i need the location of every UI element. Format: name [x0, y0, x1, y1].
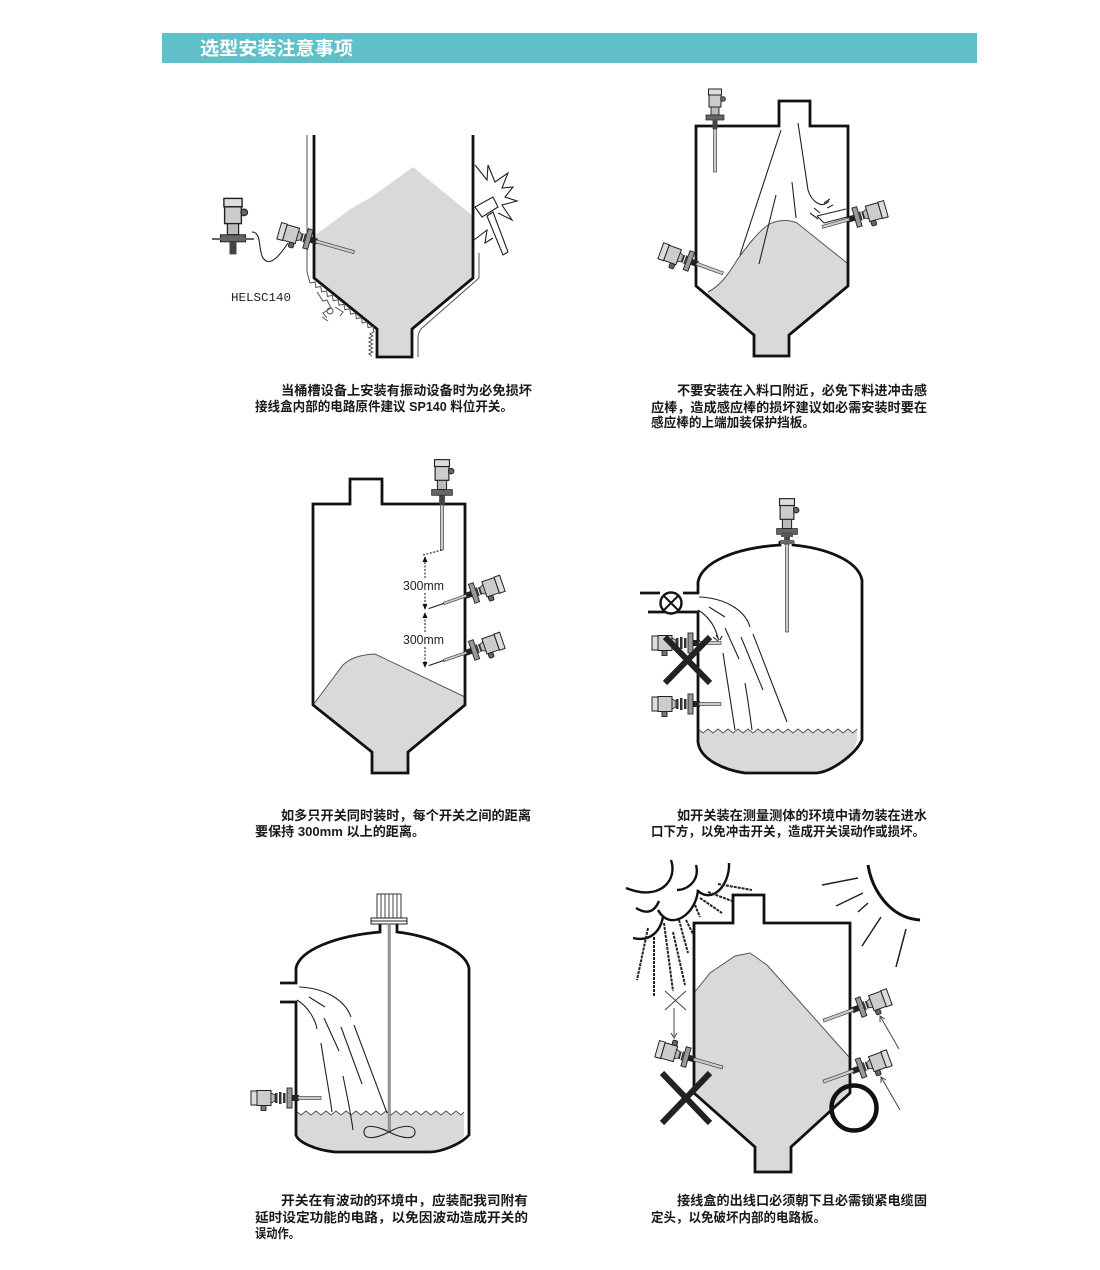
tank outline [640, 541, 862, 773]
header title: 选型安装注意事项 [200, 38, 354, 59]
outer frame lines [307, 135, 479, 357]
angled sensor [276, 221, 357, 265]
caption: 感应棒的上端加装保护挡板。 [651, 415, 815, 430]
panel: multiple switch spacing [255, 460, 531, 839]
left sensor [656, 241, 726, 286]
panel: wave environment [251, 894, 528, 1241]
material fill [313, 654, 465, 773]
silo outline [314, 135, 473, 357]
vibration zigzag [310, 282, 374, 356]
top sensor [432, 460, 454, 550]
arrow lower [881, 1077, 900, 1110]
caption: 误动作。 [255, 1226, 300, 1241]
mounting plate [212, 238, 254, 240]
wrong mark X [665, 637, 710, 683]
panel: vibration equipment [212, 135, 532, 414]
caption: 要保持 300mm 以上的距离。 [255, 824, 425, 839]
dimension arrows [422, 556, 428, 668]
caption: 接线盒的出线口必须朝下且必需锁紧电缆固 [677, 1193, 927, 1208]
tank outline [280, 924, 469, 1152]
lower side sensor [652, 694, 721, 716]
upper side sensor [652, 633, 721, 656]
caption: 口下方，以免冲击开关，造成开关误动作或损坏。 [651, 824, 925, 839]
caption: 接线盒内部的电路原件建议 SP140 料位开关。 [255, 399, 513, 414]
caption [255, 383, 532, 414]
panel: cable outlet and weather [626, 860, 927, 1225]
dimension label: 300mm [403, 579, 444, 593]
caption: 延时设定功能的电路，以免因波动造成开关的 [255, 1210, 528, 1225]
material contour [694, 953, 849, 1057]
mixer motor [371, 894, 407, 924]
water streams [297, 987, 387, 1130]
lower side sensor [425, 631, 507, 678]
falling material lines [740, 123, 829, 264]
caption: 不要安装在入料口附近，必免下料进冲击感 [677, 383, 927, 398]
correct mark circle [832, 1086, 876, 1130]
caption: 定头，以免破坏内部的电路板。 [651, 1210, 826, 1225]
remote housing HELSC140 [220, 198, 248, 254]
material contour [313, 654, 465, 705]
propeller [364, 1126, 415, 1138]
top sensor [706, 89, 725, 172]
right sensor [820, 199, 889, 239]
wrong mark X [662, 1073, 710, 1123]
liquid fill [296, 1111, 464, 1152]
liquid surface [698, 729, 857, 733]
hammer [475, 197, 508, 255]
silo outline [313, 479, 465, 773]
caption [255, 808, 531, 839]
panel: feed inlet [651, 89, 927, 430]
protective baffle [817, 209, 847, 223]
material fill [705, 221, 847, 356]
thin cross [665, 991, 686, 1010]
silo outline [694, 895, 850, 1172]
caption [255, 1193, 528, 1241]
lower right sensor [820, 1048, 894, 1094]
dimension lines [423, 550, 442, 664]
silo material fill [314, 167, 473, 357]
impact burst [474, 165, 517, 243]
caption [651, 383, 927, 430]
top sensor [777, 499, 799, 632]
liquid surface [296, 1111, 464, 1115]
valve [660, 592, 682, 614]
wrong sensor [654, 1036, 726, 1077]
arrow to sensor [671, 1008, 677, 1038]
caption: 应棒，造成感应棒的损坏建议如必需安装时要在 [651, 400, 927, 415]
silo outline [696, 101, 848, 356]
sun rays [822, 878, 906, 967]
upper side sensor [425, 574, 507, 621]
arrow upper [880, 1016, 899, 1049]
liquid fill [698, 729, 857, 773]
header bar [162, 33, 977, 63]
caption: 如开关装在测量测体的环境中请勿装在进水 [677, 808, 927, 823]
panel: inlet valve [640, 499, 927, 839]
sun [868, 865, 920, 920]
mixer shaft [388, 924, 390, 1131]
material contour [708, 221, 847, 292]
dimension label: 300mm [403, 633, 444, 647]
upper right sensor [820, 987, 894, 1033]
water streams [698, 597, 787, 730]
cable [252, 232, 288, 262]
rain cloud [626, 860, 729, 939]
rain dashes [637, 884, 752, 997]
vibration motor [317, 292, 343, 321]
side sensor [251, 1088, 321, 1110]
caption: 如多只开关同时装时，每个开关之间的距离 [281, 808, 531, 823]
caption [651, 1193, 927, 1225]
caption: 开关在有波动的环境中，应装配我司附有 [281, 1193, 528, 1208]
splash marks [713, 635, 722, 641]
material fill [694, 953, 849, 1172]
caption [651, 808, 927, 839]
caption: 当桶槽设备上安装有振动设备时为必免损坏 [281, 383, 532, 398]
impact sparks [810, 199, 833, 219]
model label: HELSC140 [231, 291, 291, 305]
